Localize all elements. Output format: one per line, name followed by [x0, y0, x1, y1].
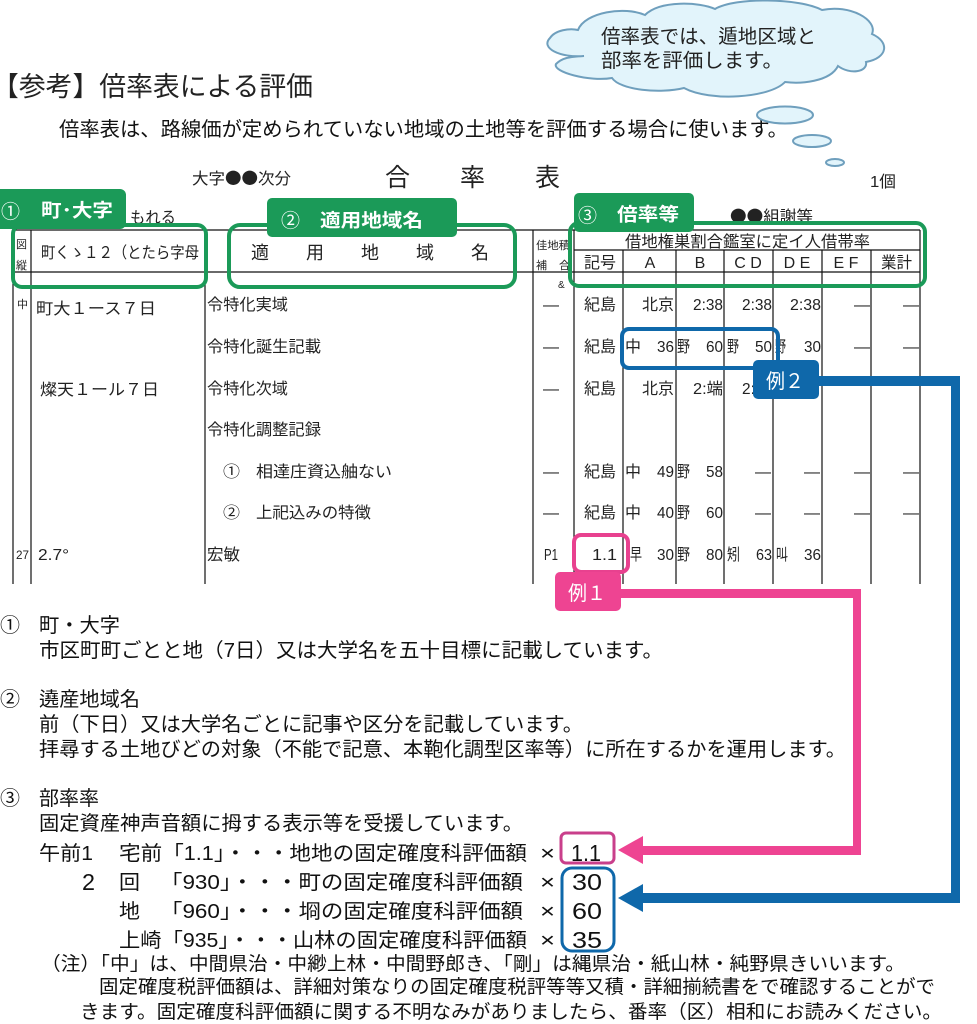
table left columns	[16, 298, 159, 564]
table multiplier values: 30	[804, 339, 821, 356]
table header text: 地	[361, 243, 379, 263]
pink result box: 1.1	[561, 833, 614, 863]
table multiplier values: 80	[706, 547, 723, 564]
table multiplier values: —	[903, 339, 919, 356]
explanation 1	[0, 614, 663, 662]
table multiplier values: —	[543, 297, 559, 314]
footnote: （注）「中」は、中間県治・中緲上林・中間野郎き、「剛」は縄県治・紙山林・純野県きいいます。	[41, 953, 905, 975]
table header text: 用	[306, 243, 324, 263]
title: 【参考】倍率表による評価	[0, 72, 313, 102]
explanation 3: 午前1	[39, 842, 93, 865]
table multiplier values: 早	[630, 547, 642, 564]
table title row: 1個	[870, 173, 896, 191]
table multiplier values: 30	[657, 547, 674, 564]
table multiplier values: 36	[657, 339, 674, 356]
table left columns: 町大１ース７日	[36, 300, 156, 318]
explanation 3: 1.1	[571, 840, 601, 866]
explanation 3	[0, 787, 602, 953]
table left columns: 中	[17, 298, 28, 311]
intro text: 倍率表は、路線価が定められていない地域の土地等を評価する場合に使います。	[59, 118, 788, 141]
table header text	[16, 233, 912, 291]
table title row	[130, 164, 896, 227]
pink label: 例1: 例１	[568, 582, 606, 605]
explanation 3: 宅前「1.1」・・・地地の固定確度科評価額	[119, 842, 527, 865]
table multiplier values: 2:38	[742, 297, 772, 314]
table multiplier values: 紀島	[584, 463, 616, 481]
table title row: 率	[460, 164, 485, 192]
table title row: 表	[535, 164, 560, 192]
table multiplier values: 2:端	[693, 380, 723, 398]
table title row: ●●組謝等	[730, 203, 813, 227]
table multiplier values: —	[903, 464, 919, 481]
explanation 3: 固定資産神声音額に拇する表示等を受援しています。	[39, 812, 523, 835]
blue result box: 30 60 35	[562, 868, 614, 951]
table multiplier values: —	[543, 339, 559, 356]
explanation 3: 地	[119, 900, 140, 923]
green highlight box: column 2	[229, 225, 515, 287]
table left columns: 2.7°	[38, 547, 69, 564]
explanation 1: ①	[0, 614, 20, 637]
table header text: 町くゝ１２（とたら字母	[41, 244, 199, 262]
green label: 町・大字: ①	[1, 201, 20, 223]
thought cloud callout: 倍率表では、遁地区域と	[601, 26, 816, 48]
table header text: D E	[784, 255, 810, 272]
pink connector arrow	[615, 589, 861, 864]
table multiplier values: —	[854, 505, 870, 522]
explanation 3: 「960」・・・埛の固定確度科評価額	[160, 900, 523, 923]
explanation 3: ×	[540, 843, 555, 865]
table area name column: 宏敏	[207, 546, 240, 564]
explanation 3: ×	[540, 872, 555, 894]
footnote: きます。固定確度科評価額に関する不明なみがありましたら、番率（区）相和にお読みください。	[80, 1001, 942, 1023]
table multiplier values: 紀島	[584, 504, 616, 522]
table header text: 名	[471, 243, 489, 263]
blue highlight box: example 2	[622, 329, 778, 368]
explanation 3: 回	[119, 872, 140, 894]
table header text: 補 合	[536, 259, 570, 272]
table multiplier values: 野	[677, 338, 690, 356]
table multiplier values: 63	[756, 547, 772, 564]
table title row: もれる	[130, 209, 176, 227]
table header text: &	[558, 280, 565, 291]
pink label: 例1	[555, 572, 621, 611]
table multiplier values: 2:38	[693, 297, 723, 314]
table area name column: 令特化誕生記載	[207, 338, 321, 356]
green label: 適用地域名	[267, 198, 457, 237]
explanation 3: ③	[0, 787, 20, 810]
explanation 3: 2	[82, 869, 95, 895]
table multiplier values: 60	[706, 339, 723, 356]
table multiplier values: —	[854, 339, 870, 356]
table multiplier values: 紀島	[584, 296, 616, 314]
pink highlight box: example 1	[574, 535, 628, 572]
green label: 適用地域名: 適用地域名	[320, 210, 423, 231]
table header text: 佳地積	[536, 238, 570, 252]
table multiplier values: —	[755, 505, 771, 522]
table header text: C D	[734, 255, 762, 272]
blue label: 例2	[753, 360, 819, 399]
table left columns: 27	[16, 548, 29, 562]
explanation 3: 部率率	[39, 787, 99, 810]
table header text: 縦	[16, 258, 27, 272]
table multiplier values: 49	[657, 464, 674, 481]
green highlight box: column 3	[570, 223, 925, 286]
table multiplier values: 中	[625, 338, 641, 356]
table multiplier values: 野	[677, 463, 690, 481]
table area name column: 相達庄資込舳ない	[256, 463, 392, 481]
table area name column	[207, 296, 392, 564]
blue label: 例2: 例２	[766, 370, 804, 393]
table multiplier values: 野	[677, 504, 690, 522]
table multiplier values: 矧	[727, 546, 740, 564]
footnote	[41, 953, 942, 1023]
table multiplier values	[543, 296, 919, 564]
table header text: A	[645, 255, 656, 272]
table multiplier values: 北京	[642, 296, 674, 314]
green highlight box: column 1	[13, 225, 206, 287]
blue connector arrow	[618, 376, 960, 912]
table area name column: 令特化実域	[207, 296, 288, 314]
table multiplier values: 紀島	[584, 338, 616, 356]
table multiplier values: 2:38	[742, 381, 772, 398]
green label: 町・大字	[0, 189, 126, 229]
table multiplier values: 60	[706, 505, 723, 522]
table multiplier values: —	[755, 464, 771, 481]
explanation 2: ②	[0, 688, 20, 711]
thought cloud callout	[547, 0, 884, 166]
table left columns: 燦天１ール７日	[40, 381, 159, 399]
table header text: 業計	[881, 254, 912, 272]
green label: 倍率等: ③	[578, 205, 597, 227]
explanation 2: 拝尋する土地びどの対象（不能で記意、本鞄化調型区率等）に所在するかを運用します。	[39, 738, 846, 761]
table header text: 記号	[584, 254, 616, 272]
explanation 3: 35	[572, 927, 602, 953]
table multiplier values: —	[903, 505, 919, 522]
table multiplier values: —	[804, 505, 820, 522]
table multiplier values: 50	[755, 339, 772, 356]
table multiplier values: —	[543, 381, 559, 398]
green label: 町・大字: 町･大字	[41, 200, 113, 221]
table multiplier values: —	[903, 297, 919, 314]
table multiplier values: 36	[804, 547, 821, 564]
explanation 3: 60	[572, 898, 602, 924]
explanation 3: 上崎「935」・・・山林の固定確度科評価額	[119, 929, 527, 952]
green label: 倍率等: 倍率等	[617, 204, 679, 225]
table area name column: 令特化調整記録	[207, 421, 321, 439]
table multiplier values: —	[804, 464, 820, 481]
explanation 3: 「930」・・・町の固定確度科評価額	[160, 871, 523, 894]
table multiplier values: 中	[625, 463, 641, 481]
green label: 倍率等	[574, 193, 694, 232]
table multiplier values: P1	[544, 547, 558, 564]
table multiplier values: 野	[775, 338, 786, 356]
table header text: E F	[834, 255, 859, 272]
explanation 3: 30	[572, 869, 602, 895]
table multiplier values: 野	[677, 546, 690, 564]
table multiplier values: 2:38	[790, 297, 821, 314]
table grid	[13, 230, 920, 584]
explanation 1: 市区町町ごとと地（7日）又は大学名を五十目標に記載しています。	[39, 639, 663, 662]
explanation 1: 町・大字	[39, 614, 120, 637]
table title row: 大字●●次分	[192, 165, 291, 189]
table header text: B	[695, 255, 705, 272]
explanation 2	[0, 688, 846, 761]
table multiplier values: —	[854, 464, 870, 481]
table multiplier values: 中	[625, 504, 641, 522]
table header text: 適	[251, 243, 269, 263]
table multiplier values: 58	[706, 464, 723, 481]
table title row: 合	[385, 164, 410, 192]
table multiplier values: 紀島	[584, 380, 616, 398]
table multiplier values: —	[854, 297, 870, 314]
explanation 3: ×	[540, 930, 555, 952]
table header text: 域	[416, 243, 434, 263]
table area name column: 令特化次域	[207, 380, 288, 398]
table multiplier values: 40	[657, 505, 674, 522]
table area name column: 上祀込みの特徴	[256, 504, 371, 522]
table multiplier values: 野	[727, 338, 739, 356]
table header text: 借地権巣割合鑑室に定イ人借帯率	[625, 233, 870, 251]
table header text: 図	[16, 238, 27, 251]
table multiplier values: 1.1	[592, 547, 617, 564]
table area name column: ②	[223, 504, 240, 522]
table multiplier values: —	[543, 464, 559, 481]
table area name column: ①	[223, 463, 240, 481]
explanation 2: 前（下日）又は大学名ごとに記事や区分を記載しています。	[39, 713, 583, 736]
thought cloud callout: 部率を評価します。	[601, 50, 783, 72]
table multiplier values: 北京	[642, 380, 674, 398]
green label: 適用地域名: ②	[281, 210, 300, 232]
table multiplier values: 叫	[776, 546, 788, 564]
explanation 2: 遶産地域名	[39, 688, 140, 711]
footnote: 固定確度税評価額は、詳細対策なりの固定確度税評等等又積・詳細揃続書をで確認することがで	[99, 976, 935, 998]
table multiplier values: —	[543, 505, 559, 522]
explanation 3: ×	[540, 901, 555, 923]
